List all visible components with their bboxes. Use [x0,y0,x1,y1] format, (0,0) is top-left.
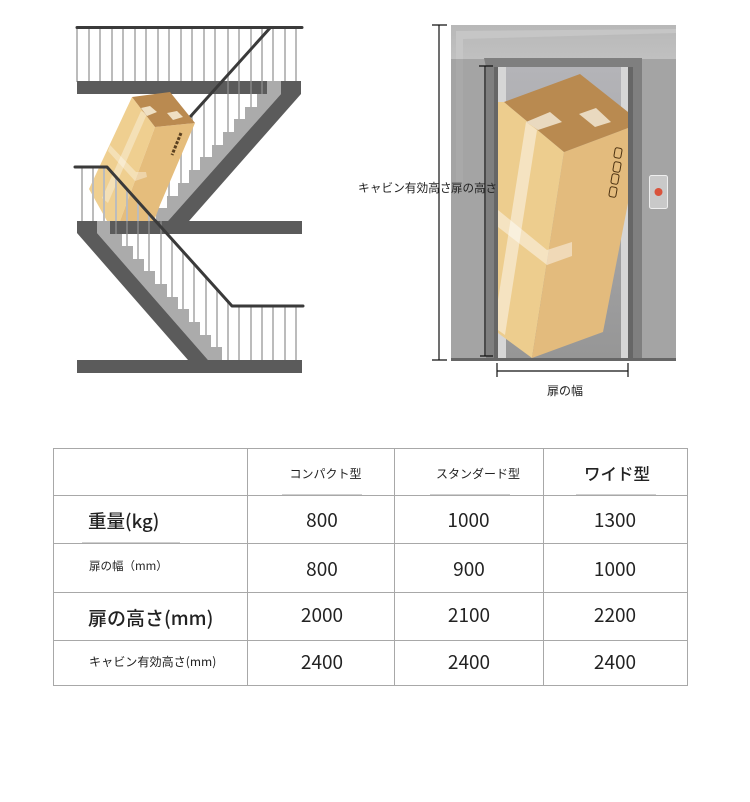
values: door width row: 1000 [594,555,636,582]
floor line [451,358,676,361]
header: wide: ワイド型 [584,461,650,485]
values: door height row: 2100 [448,601,490,628]
values: cabin height row: 2400 [594,648,636,675]
dimension: door width [497,363,628,377]
middle landing [110,221,302,234]
upper diagonal handrail [190,28,270,117]
values: door width row [306,555,636,582]
values: weight row: 1300 [594,506,636,533]
values: weight row: 1000 [447,506,490,533]
call button [650,176,668,208]
door frame [484,58,642,358]
illustration: staircase with box [75,28,303,373]
header: standard: スタンダード型 [436,465,520,482]
lower flight steps [97,221,222,360]
specification table [54,448,688,686]
elevator interior [498,67,628,358]
row label: door width: 扉の幅（mm） [89,558,168,574]
box handling icons [609,147,622,198]
lower flight stringer [77,221,208,360]
dimension: cabin height [432,25,447,360]
values: weight row [306,506,636,533]
label: door height: 扉の高さ [451,180,497,196]
lower handrail [75,167,303,306]
values: cabin height row [301,648,636,675]
values: door width row: 900 [453,555,485,582]
values: door height row [301,601,636,628]
upper railing balusters [77,28,296,196]
bottom landing [77,360,302,373]
upper flight stringer [168,81,301,221]
top landing [77,81,267,94]
values: door width row: 800 [306,555,338,582]
row label: door height: 扉の高さ(mm) [88,604,213,631]
label: door width: 扉の幅 [547,382,583,399]
upper flight steps [156,81,281,221]
values: door height row: 2200 [594,601,636,628]
values: weight row: 800 [306,506,338,533]
values: cabin height row: 2400 [301,648,343,675]
top handrail [77,26,302,29]
illustration: elevator with box [451,25,676,361]
row label: cabin height: キャビン有効高さ(mm) [89,653,216,670]
row label: weight: 重量(kg) [88,508,159,534]
header: compact: コンパクト型 [289,465,362,482]
elevator header [451,25,676,189]
lower railing balusters [82,167,296,360]
cardboard box in elevator [498,74,628,358]
cardboard box on stairs [89,92,195,221]
values: cabin height row: 2400 [448,648,490,675]
table grid [54,448,688,686]
dimension: door height [479,66,493,356]
elevator wall [451,25,676,360]
door light strips [498,67,628,358]
label: cabin height: キャビン有効高さ [358,179,452,196]
values: door height row: 2000 [301,601,343,628]
